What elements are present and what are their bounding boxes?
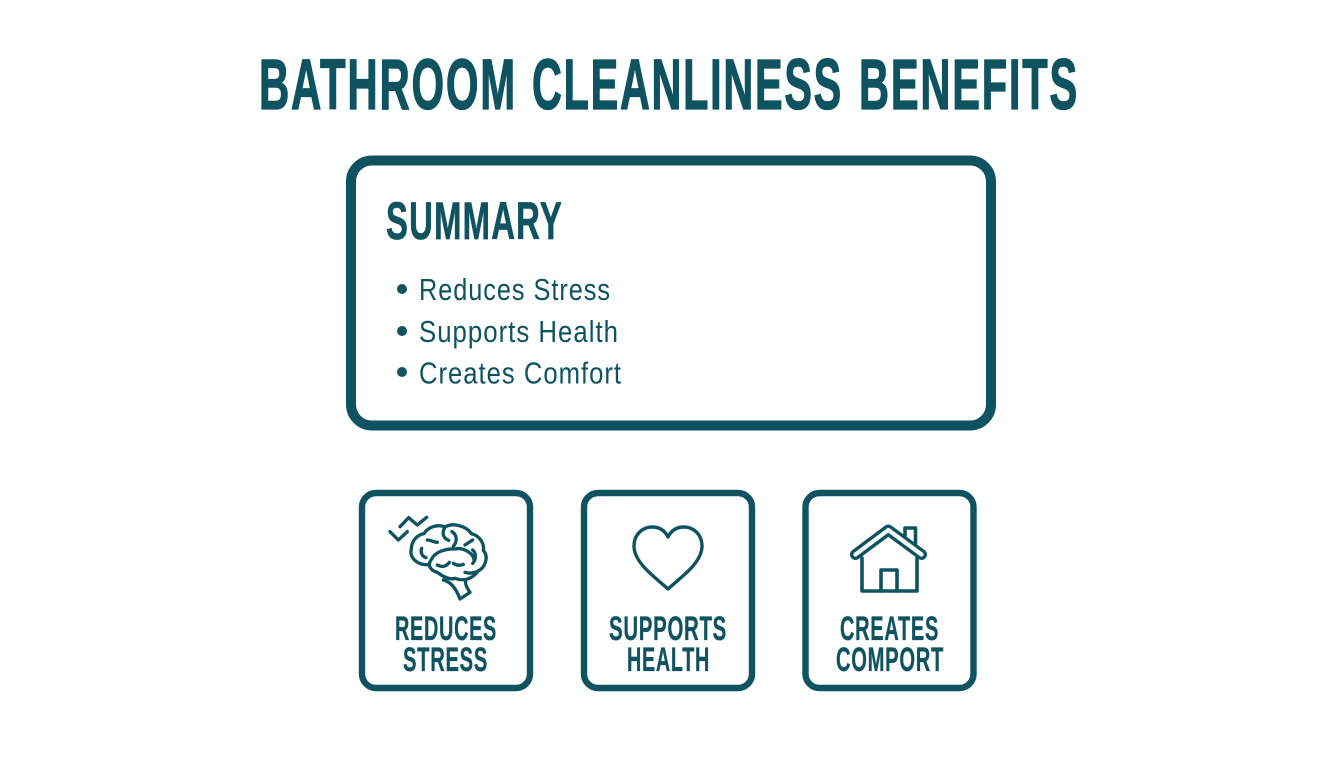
card label [609,610,727,679]
card label: CREATES [840,610,939,648]
panel: reduces stress card [362,493,530,688]
card label: SUPPORTS [609,610,727,648]
icon: heart [634,527,702,589]
card border [584,493,752,688]
icon: house [856,528,922,591]
title: CLEANLINESS [532,46,843,125]
panel: creates comfort card [806,493,974,688]
card label [395,610,497,679]
card label: HEALTH [627,641,710,679]
title: BENEFITS [859,46,1079,125]
card border [362,493,530,688]
summary list: Creates Comfort [419,356,622,390]
summary list: Supports Health [419,314,619,349]
card border [806,493,974,688]
card label: REDUCES [395,610,497,648]
panel: summary [351,160,991,426]
icon: brain with stress marks [390,517,486,599]
panel: supports health card [584,493,752,688]
title [259,46,1079,125]
card label [836,610,944,679]
summary heading: SUMMARY [386,192,563,251]
title: BATHROOM [259,46,517,125]
summary list: Reduces Stress [419,272,611,307]
card label: STRESS [403,641,488,679]
summary list [397,272,622,390]
summary panel border [351,160,991,426]
card label: COMPORT [836,641,944,679]
